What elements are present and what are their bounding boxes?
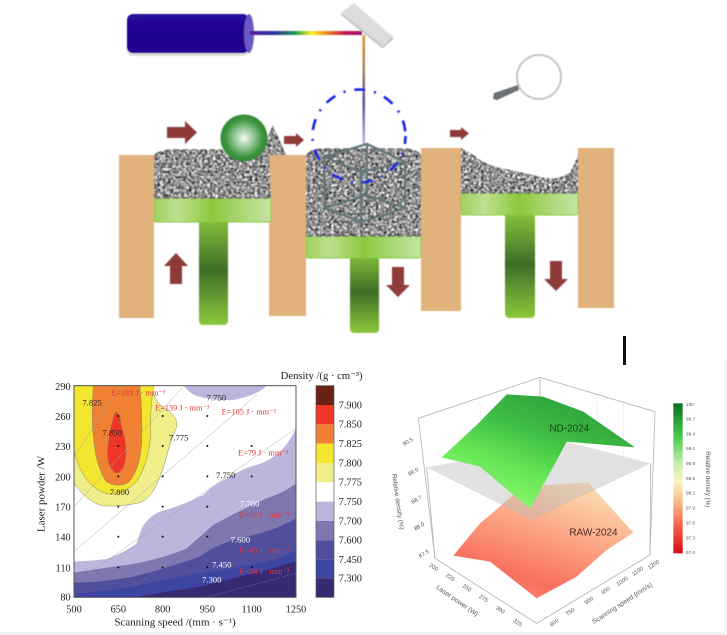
contour value labels (82, 392, 259, 585)
arrow: platform down right (544, 261, 568, 291)
relative density colorbar: 99.4 (686, 431, 695, 436)
y axis tick labels: 140 (55, 533, 71, 544)
z axis title: Relative density (%) (390, 473, 405, 530)
relative density colorbar: Relative density (%) (704, 451, 711, 507)
plot area (74, 386, 296, 597)
x axis tick labels: 1100 (242, 604, 262, 615)
scale bar mark (623, 336, 626, 365)
laser power ticks: 200 (428, 563, 439, 573)
scanning speed ticks: 1100 (631, 566, 645, 578)
x axis tick labels: 650 (111, 604, 126, 615)
y axis tick labels: 80 (60, 593, 71, 604)
arrow: platform down middle (386, 267, 410, 297)
x axis tick labels: 800 (155, 604, 170, 615)
powder dashed outlines (155, 149, 577, 236)
density colorbar: 7.800 (339, 458, 362, 469)
contour value labels: 7.750 (216, 470, 235, 480)
relative density colorbar: 97.6 (686, 521, 695, 526)
laser beam horizontal spectrum (250, 31, 362, 35)
density colorbar: 7.775 (339, 478, 362, 489)
laser source cylinder (127, 14, 254, 56)
relative density colorbar: 99.7 (686, 416, 695, 421)
density colorbar: 7.900 (339, 400, 362, 411)
energy density labels: E=34 J · mm⁻³ (239, 567, 290, 576)
right build platform and piston (461, 191, 578, 318)
z axis ticks: 87.5 (418, 549, 431, 560)
density colorbar: 7.825 (339, 439, 362, 450)
magnifying glass (493, 55, 561, 100)
arrow: recoater direction medium (284, 133, 304, 147)
x axis tick labels: 1250 (286, 604, 306, 615)
sample points (117, 415, 253, 568)
y axis tick labels: 260 (55, 412, 71, 423)
relative density colorbar (673, 402, 711, 555)
relative density colorbar: 98.2 (686, 491, 695, 496)
z axis ticks: 89.0 (407, 467, 420, 478)
scanning speed ticks: 750 (565, 607, 576, 618)
scanning speed ticks (549, 559, 661, 628)
scanning speed ticks: 950 (601, 586, 612, 596)
contour bands (74, 386, 177, 506)
z axis ticks: 90.5 (402, 437, 415, 448)
3D axis box (418, 377, 655, 623)
relative density colorbar: 97.3 (686, 535, 695, 540)
RAW-2024 surface (453, 483, 633, 598)
relative density colorbar: 97.9 (686, 506, 695, 511)
energy density labels: E=60 J · mm⁻³ (239, 510, 289, 519)
energy density labels: E=183 J · mm⁻³ (111, 389, 166, 398)
laser power ticks (428, 563, 523, 628)
y axis tick labels: 200 (55, 472, 71, 483)
arrow: recoater direction large (167, 121, 197, 144)
laser power ticks: 250 (461, 583, 472, 594)
energy density labels: E=45 J · mm⁻³ (239, 546, 290, 555)
contour value labels: 7.600 (231, 534, 250, 544)
printed cube wireframe (324, 144, 405, 222)
relative density colorbar: 100 (686, 402, 694, 407)
panel: powder bed fusion process diagram (119, 3, 614, 333)
middle build platform and piston (306, 234, 421, 333)
powder bed left (154, 125, 286, 198)
energy density labels: E=105 J · mm⁻³ (222, 408, 277, 417)
arrow: platform up (164, 253, 188, 284)
laser focus dash-dot circle (312, 90, 406, 182)
build walls (119, 148, 614, 318)
left build platform and piston (154, 197, 271, 325)
y axis tick labels: 170 (55, 503, 71, 514)
y axis title: Laser powder /W (36, 455, 48, 532)
contour value labels: 7.300 (202, 575, 221, 585)
chart: density contour map (36, 371, 363, 628)
y axis tick labels: 230 (55, 442, 71, 453)
y axis tick labels: 110 (56, 563, 71, 574)
z axis ticks (402, 437, 431, 560)
contour value labels: 7.700 (240, 499, 259, 509)
powder bed middle (306, 149, 421, 236)
z axis ticks: 88.7 (411, 495, 423, 506)
x axis tick labels (66, 604, 306, 615)
relative density colorbar: 97.0 (686, 550, 695, 555)
density colorbar: 7.600 (339, 536, 362, 547)
x axis tick labels: 500 (66, 604, 82, 615)
powder bed right (461, 148, 578, 193)
x axis title: Scanning speed /(mm · s⁻¹) (114, 616, 236, 628)
colorbar title: Density /(g · cm⁻³) (281, 371, 363, 382)
density colorbar: 7.850 (339, 420, 362, 431)
density colorbar: 7.750 (339, 497, 362, 508)
y axis tick labels: 290 (55, 382, 71, 393)
laser power ticks: 225 (444, 573, 455, 583)
laser power ticks: 325 (512, 618, 523, 628)
chart: 3D relative density surfaces (390, 377, 711, 628)
x axis tick labels: 950 (200, 604, 215, 615)
relative density colorbar: 98.8 (686, 461, 695, 466)
laser power ticks: 275 (478, 594, 489, 604)
contour value labels: 7.450 (212, 560, 231, 570)
scanning mirror (341, 3, 393, 48)
laser beam vertical (362, 35, 365, 145)
image edge strip (0, 360, 727, 635)
scanning speed ticks: 600 (549, 618, 560, 628)
density colorbar (316, 386, 362, 597)
contour value labels: 7.800 (110, 487, 129, 497)
plot frame (74, 386, 296, 597)
RAW-2024 label: RAW-2024 (569, 528, 618, 539)
scanning speed ticks: 900 (584, 596, 595, 606)
ND-2024 label: ND-2024 (549, 424, 590, 435)
contour value labels: 7.775 (169, 432, 188, 442)
scanning speed ticks: 1000 (616, 576, 630, 588)
energy density labels (111, 389, 290, 576)
density colorbar: 7.450 (339, 555, 362, 566)
density colorbar: 7.700 (339, 516, 362, 527)
y axis tick labels (55, 382, 71, 604)
scanning speed axis title: Scanning speed (mm/s) (591, 582, 654, 626)
contour value labels: 7.825 (82, 398, 102, 408)
iso-energy lines (74, 386, 296, 597)
density colorbar: 7.300 (339, 574, 362, 585)
energy density labels: E=79 J · mm⁻³ (238, 448, 289, 457)
relative density colorbar: 98.5 (686, 476, 695, 481)
reference plane (427, 442, 651, 520)
contour value labels: 7.750 (207, 392, 226, 402)
ND-2024 surface (442, 394, 635, 508)
z axis ticks: 88.0 (413, 522, 426, 532)
scanning speed ticks: 1200 (647, 559, 661, 571)
relative density colorbar: 99.1 (686, 446, 695, 451)
laser power axis title: Laser power (W) (435, 584, 479, 618)
laser power ticks: 300 (494, 605, 505, 616)
energy density labels: E=139 J · mm⁻³ (155, 404, 210, 413)
arrow: recoater direction small (450, 127, 469, 140)
contour value labels: 7.850 (102, 427, 122, 437)
recoater ball (220, 114, 268, 162)
